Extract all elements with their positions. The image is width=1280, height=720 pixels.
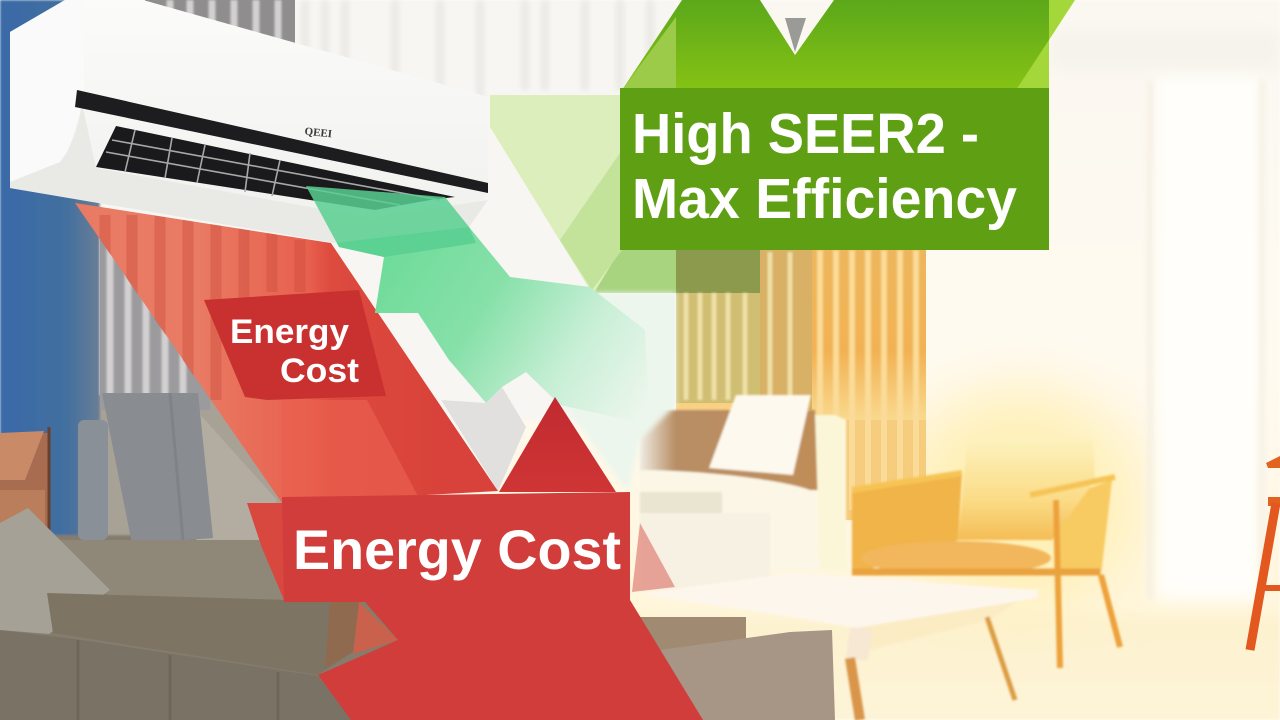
mint green efficiency arrow — [306, 186, 650, 425]
coffee table — [640, 573, 1038, 720]
heading box: High SEER2 — [620, 88, 1049, 250]
orange curtain — [676, 250, 926, 520]
big red arrow: Energy Cost: Energy Cost — [293, 518, 621, 581]
red diagonal arrow band — [75, 203, 498, 503]
front sofa left — [0, 508, 398, 720]
air conditioner unit — [10, 0, 488, 243]
pale mint wash under arrow — [441, 293, 676, 492]
AC lower lip — [10, 103, 488, 243]
AC side panel — [10, 0, 84, 182]
right sofa — [640, 395, 846, 592]
grey curtain — [100, 0, 295, 410]
front sofa right — [640, 617, 835, 720]
AC vent grille — [96, 126, 455, 210]
small red label: Energy Cost: Energy — [230, 313, 349, 351]
big red arrow: Energy Cost — [247, 397, 703, 720]
armchair — [852, 437, 1120, 668]
mint arrow overlay on AC — [306, 186, 476, 257]
AC body — [10, 0, 488, 243]
pale green background arrow — [490, 95, 676, 293]
small red label: Energy Cost — [204, 290, 386, 400]
back sofa left — [78, 393, 277, 545]
green chevron top — [622, 0, 1075, 90]
white shard beside red band — [331, 243, 498, 491]
small red label: Energy Cost: Cost — [280, 352, 359, 390]
AC brand label: QEEI — [304, 126, 333, 140]
heading box: High SEER2: High SEER2 - — [632, 102, 979, 166]
AC front display strip — [75, 90, 488, 193]
right edge stool — [1250, 456, 1280, 650]
sheer white curtains — [305, 0, 650, 100]
heading box: High SEER2: Max Efficiency — [632, 167, 1017, 231]
left shelf — [0, 427, 49, 530]
